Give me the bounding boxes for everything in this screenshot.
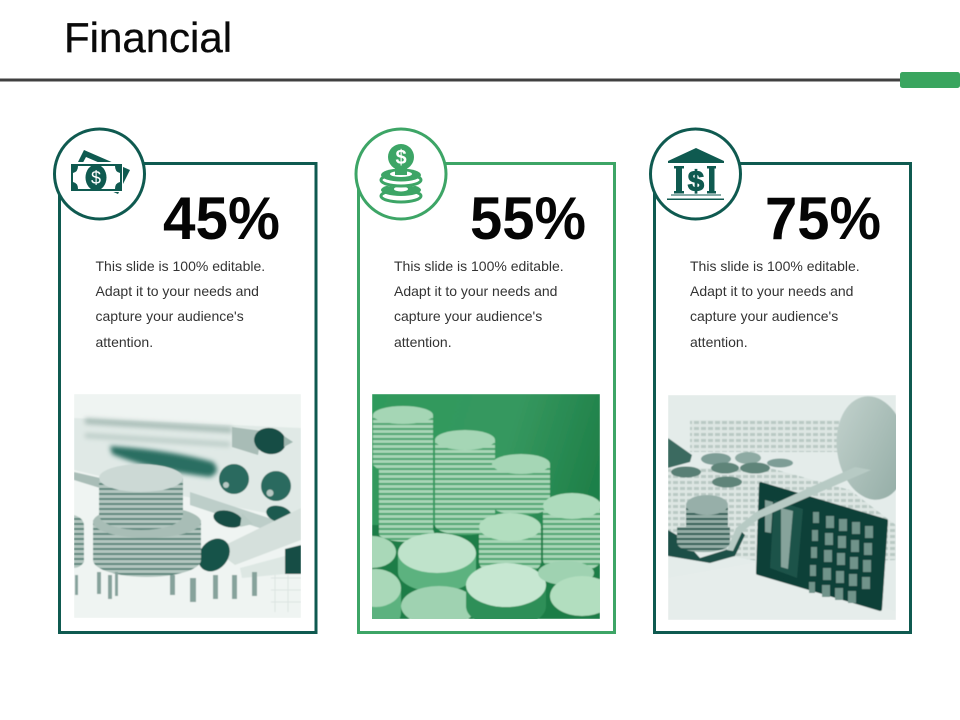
description text: capture your audience's xyxy=(96,308,244,324)
description text: capture your audience's xyxy=(394,308,542,324)
icon: bank building: $ xyxy=(688,166,704,198)
percentage 75: 75% xyxy=(765,185,881,252)
panel: card 1 xyxy=(54,129,316,632)
panel: card 2 xyxy=(348,129,614,632)
percentage 55: 55% xyxy=(470,185,586,252)
description text: This slide is 100% editable. xyxy=(96,258,265,274)
description text: capture your audience's xyxy=(690,308,838,324)
header rule xyxy=(0,78,902,82)
description text: This slide is 100% editable. xyxy=(394,258,564,274)
percentage 45: 45% xyxy=(163,185,280,252)
description text: Adapt it to your needs and xyxy=(96,283,259,299)
description text: attention. xyxy=(690,334,748,350)
description text: Adapt it to your needs and xyxy=(690,283,853,299)
card 2 border xyxy=(358,164,614,632)
photo: coin stacks xyxy=(372,394,600,619)
description text: Adapt it to your needs and xyxy=(394,283,557,299)
icon: banknotes xyxy=(54,129,144,219)
description text: This slide is 100% editable. xyxy=(690,258,860,274)
panel: card 3 xyxy=(650,129,914,632)
photo: calculator and coins xyxy=(668,392,914,620)
photo: coins and pens xyxy=(74,394,301,618)
header accent tab xyxy=(900,72,960,88)
title: Financial xyxy=(64,14,232,61)
card 1 border xyxy=(60,164,316,632)
description text: attention. xyxy=(394,334,452,350)
icon: banknotes: $ xyxy=(91,168,101,188)
card 3 border xyxy=(654,164,910,632)
icon: coin stack: $ xyxy=(395,147,407,169)
description text: attention. xyxy=(96,334,153,350)
icon: coin stack xyxy=(356,129,446,219)
icon: bank building xyxy=(650,129,740,219)
